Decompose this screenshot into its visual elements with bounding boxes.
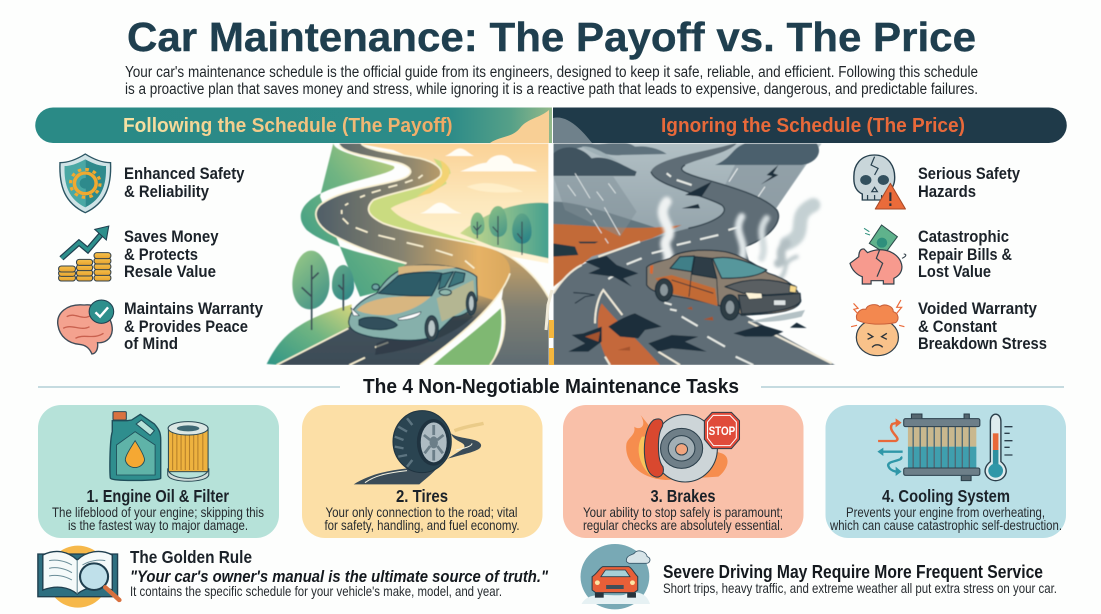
- consequence: hazards: Serious Safety: [918, 164, 1020, 183]
- callout: severe driving: [581, 544, 1057, 609]
- benefit: money: Saves Money: [124, 227, 219, 246]
- intro text: [125, 64, 978, 98]
- consequence: stress: Voided Warranty: [918, 299, 1037, 318]
- consequence: stress: Breakdown Stress: [918, 334, 1047, 353]
- benefit: warranty: of Mind: [124, 334, 178, 353]
- panel: tires: 2. Tires: [396, 486, 448, 506]
- callout: golden rule: "Your car's owner's manual is the ultimate source of truth.": [130, 568, 548, 586]
- section heading: The 4 Non-Negotiable Maintenance Tasks: [363, 375, 739, 398]
- panel: engine oil and filter: The lifeblood of your engine; skipping this: [52, 504, 264, 520]
- consequence: stress: & Constant: [918, 317, 997, 336]
- panel: brakes: Your ability to stop safely is paramount;: [583, 504, 783, 520]
- panel: cooling system: Prevents your engine from overheating,: [846, 504, 1045, 520]
- icon: red car in snowstorm: [581, 544, 650, 609]
- benefit: safety: Enhanced Safety: [124, 164, 245, 183]
- benefit: money: & Protects: [124, 245, 198, 264]
- consequence: hazards: Hazards: [918, 182, 976, 201]
- callout: golden rule: It contains the specific schedule for your vehicle's make, model, and year.: [130, 583, 502, 599]
- panel: engine oil and filter: 1. Engine Oil & Filter: [86, 486, 229, 506]
- header: following the schedule: [35, 108, 552, 143]
- cracked road: [553, 143, 835, 365]
- storm clouds: [553, 142, 667, 176]
- benefit: warranty: Maintains Warranty: [124, 299, 263, 318]
- icon: rising arrow and coins: [59, 226, 111, 281]
- icon: brake disc with flames and stop sign: [626, 412, 739, 482]
- icon: brake disc with flames and stop sign: STOP: [709, 424, 735, 438]
- car: [349, 265, 477, 355]
- consequence: hazards: [854, 155, 1020, 209]
- icon: open manual with magnifier: [38, 546, 119, 608]
- consequence: bills: [850, 225, 1012, 284]
- icon: brain with check: [58, 300, 114, 354]
- icon: cracked skull with warning triangle: [854, 155, 905, 209]
- panel: tires: Your only connection to the road; vital: [326, 504, 518, 520]
- benefit: safety: & Reliability: [124, 182, 209, 201]
- benefit: money: Resale Value: [124, 262, 216, 281]
- smoke: [663, 202, 813, 282]
- header: ignoring the schedule: Ignoring the Schedule (The Price): [661, 115, 965, 137]
- left trees: [292, 251, 354, 330]
- panel: engine oil and filter: is the fastest way to major damage.: [68, 517, 248, 533]
- panel: brakes: regular checks are absolutely essential.: [583, 517, 783, 533]
- icon: stressed head: [851, 300, 904, 356]
- callout: golden rule: The Golden Rule: [130, 547, 252, 567]
- panel: engine oil and filter: [38, 405, 279, 538]
- panel: tires: [302, 405, 542, 538]
- benefit: safety: [60, 154, 245, 213]
- vertical centre line with yellow dashes: [546, 143, 554, 365]
- intro text: is a proactive plan that saves money and stress, while ignoring it is a reactive path that leads to expensive, dangerous, and predictable failures.: [125, 81, 978, 98]
- right trees: [471, 206, 532, 255]
- illustration: broken down car on cracked road: [553, 142, 835, 365]
- consequence: bills: Catastrophic: [918, 227, 1009, 246]
- panel: brakes: [563, 405, 804, 538]
- title: Car Maintenance: The Payoff vs. The Price: [127, 14, 976, 60]
- icon: radiator, arrows and thermometer: [877, 414, 1012, 481]
- header: following the schedule: Following the Schedule (The Payoff): [123, 115, 452, 137]
- icon: oil jug and filter: [110, 412, 209, 481]
- right consequence list: [850, 155, 1047, 356]
- illustration: well-maintained car on winding road: [267, 143, 551, 365]
- consequence: bills: Repair Bills &: [918, 245, 1012, 264]
- benefit: warranty: & Provides Peace: [124, 317, 248, 336]
- callout: severe driving: Severe Driving May Require More Frequent Service: [663, 562, 1043, 582]
- panel: tires: for safety, handling, and fuel economy.: [324, 517, 520, 533]
- benefit: money: [59, 226, 219, 281]
- panel: cooling system: 4. Cooling System: [882, 486, 1010, 506]
- wrecked car: [647, 250, 805, 322]
- consequence: bills: Lost Value: [918, 262, 991, 281]
- icon: shield with gear: [60, 154, 111, 213]
- consequence: stress: [851, 299, 1047, 356]
- callout: golden rule: [38, 546, 548, 608]
- benefit: warranty: [58, 299, 263, 354]
- left benefit list: [58, 154, 263, 354]
- icon: tire on winding road: [354, 411, 484, 484]
- intro text: Your car's maintenance schedule is the official guide from its engineers, designed to keep it safe, reliable, and efficient. Following this schedule: [125, 64, 978, 81]
- header: ignoring the schedule: [553, 108, 1067, 143]
- panel: cooling system: [826, 405, 1066, 538]
- icon: broken piggy bank with cash: [850, 225, 906, 284]
- panel: brakes: 3. Brakes: [650, 486, 716, 506]
